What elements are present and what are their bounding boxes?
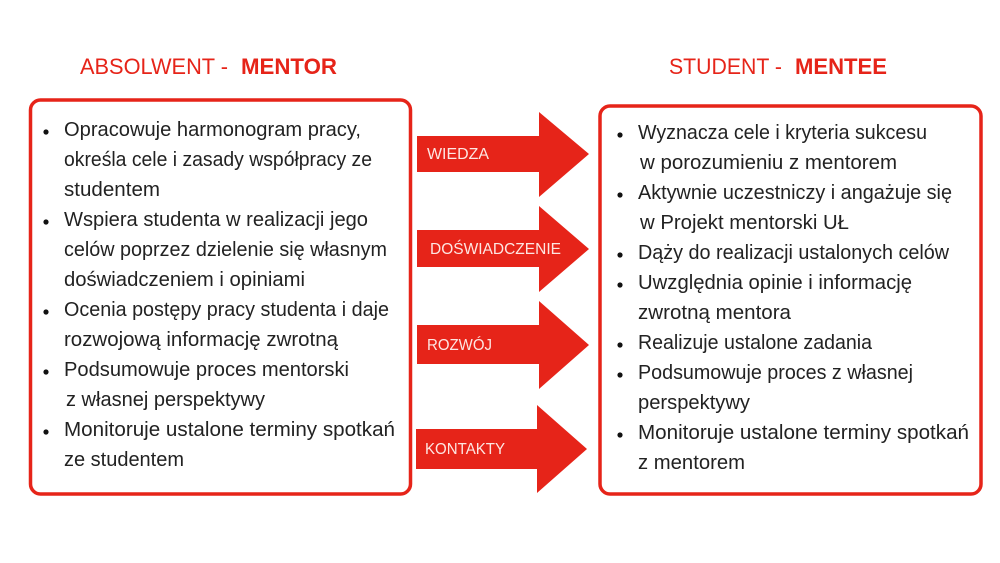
list item: harmonogram: Opracowuje harmonogram pracy, xyxy=(64,119,361,141)
list item: aktywnie: Aktywnie uczestniczy i angażuje się xyxy=(638,182,952,204)
arrow: doswiadczenie: DOŚWIADCZENIE xyxy=(430,240,561,258)
list item: monitoruje xyxy=(617,422,969,474)
panel: mentee duties xyxy=(600,106,981,494)
panel border xyxy=(30,100,410,494)
arrow: rozwoj: ROZWÓJ xyxy=(427,337,492,354)
list item: realizuje: Realizuje ustalone zadania xyxy=(638,332,873,354)
panel border xyxy=(600,106,981,494)
list item: monitoruje: ze studentem xyxy=(64,449,184,471)
list item: podsumowuje: z własnej perspektywy xyxy=(66,389,265,411)
list item: podsumowuje: perspektywy xyxy=(638,392,750,414)
arrow: doswiadczenie xyxy=(417,206,589,292)
arrow: kontakty xyxy=(416,405,587,493)
list item: ocenia xyxy=(43,299,389,351)
list item: monitoruje xyxy=(43,419,395,471)
list item: monitoruje: Monitoruje ustalone terminy spotkań xyxy=(638,422,969,444)
arrow: kontakty: KONTAKTY xyxy=(425,441,505,458)
heading: absolwent mentor: ABSOLWENT - xyxy=(80,54,228,79)
list item: wyznacza: Wyznacza cele i kryteria sukcesu xyxy=(638,122,927,144)
list item: harmonogram: studentem xyxy=(64,179,160,201)
list item: wspiera: celów poprzez dzielenie się własnym xyxy=(64,239,387,261)
list item: ocenia: rozwojową informację zwrotną xyxy=(64,329,339,351)
list item: ocenia: Ocenia postępy pracy studenta i daje xyxy=(64,299,389,321)
heading: absolwent mentor: MENTOR xyxy=(241,54,337,79)
list item: wspiera: doświadczeniem i opiniami xyxy=(64,269,305,291)
heading: student mentee xyxy=(669,54,887,79)
list item: podsumowuje xyxy=(43,359,349,411)
heading: student mentee: MENTEE xyxy=(795,54,887,79)
arrow: wiedza: WIEDZA xyxy=(427,146,490,163)
list item: uwzglednia xyxy=(617,272,912,324)
list item: harmonogram: określa cele i zasady współpracy ze xyxy=(64,149,372,171)
list item: uwzglednia: zwrotną mentora xyxy=(638,302,792,324)
list item: wyznacza xyxy=(617,122,927,174)
arrow: rozwoj xyxy=(417,301,589,389)
list item: podsumowuje: Podsumowuje proces mentorski xyxy=(64,359,349,381)
list item: wyznacza: w porozumieniu z mentorem xyxy=(639,152,897,174)
list item: dazy: Dąży do realizacji ustalonych celów xyxy=(638,242,950,264)
arrow: wiedza xyxy=(417,112,589,197)
list item: uwzglednia: Uwzględnia opinie i informację xyxy=(638,272,912,294)
list item: monitoruje: Monitoruje ustalone terminy spotkań xyxy=(64,419,395,441)
list item: wspiera xyxy=(43,209,387,291)
list item: monitoruje: z mentorem xyxy=(638,452,745,474)
panel: mentor duties xyxy=(30,100,410,494)
list item: aktywnie xyxy=(617,182,952,234)
list item: podsumowuje: Podsumowuje proces z własnej xyxy=(638,362,913,384)
list item: harmonogram xyxy=(43,119,372,201)
list item: aktywnie: w Projekt mentorski UŁ xyxy=(639,212,849,234)
list item: podsumowuje xyxy=(617,362,913,414)
heading: student mentee: STUDENT - xyxy=(669,54,782,79)
heading: absolwent mentor xyxy=(80,54,337,79)
list item: wspiera: Wspiera studenta w realizacji jego xyxy=(64,209,368,231)
